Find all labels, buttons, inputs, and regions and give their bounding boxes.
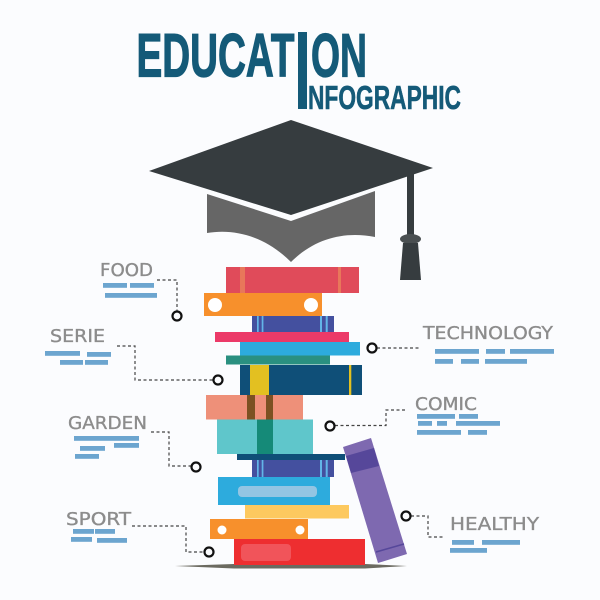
marker: technology (368, 344, 376, 352)
label: garden: GARDEN (68, 413, 147, 434)
title: ON (311, 22, 367, 90)
book: pink thin (215, 332, 349, 342)
callout: technology (368, 323, 554, 364)
book: blue with label (218, 477, 330, 505)
label: comic: COMIC (415, 394, 477, 415)
marker: garden (192, 462, 200, 472)
text lines: healthy (450, 540, 520, 553)
book: navy with yellow band (240, 365, 362, 395)
text lines: sport (71, 529, 127, 543)
title (136, 22, 461, 116)
marker: comic (326, 422, 334, 430)
book: indigo upper (252, 316, 334, 332)
text lines: garden (74, 436, 139, 459)
callout: sport (66, 509, 214, 556)
book: indigo lower (252, 460, 334, 477)
label: serie: SERIE (50, 326, 105, 347)
title: EDUCAT (136, 22, 294, 90)
book: teal thin (226, 356, 330, 364)
icon: graduation cap (149, 120, 433, 280)
connector: sport (132, 526, 204, 552)
text lines: technology (435, 349, 554, 364)
label: sport: SPORT (66, 509, 132, 530)
book: navy thin (237, 454, 345, 460)
marker: serie (214, 376, 222, 384)
connector: serie (117, 346, 213, 380)
label: food: FOOD (100, 260, 153, 281)
title: NFOGRAPHIC (308, 79, 461, 116)
connector: food (157, 280, 177, 311)
connector: healthy (411, 516, 443, 537)
label: technology: TECHNOLOGY (422, 323, 554, 344)
book: orange with dots (204, 293, 322, 316)
marker: food (172, 312, 182, 320)
book: red bottom (234, 539, 365, 565)
book: light teal (217, 420, 313, 454)
book: orange lower (210, 519, 308, 539)
book: red top (226, 267, 359, 293)
ground shadow (175, 564, 407, 568)
book: cyan thin (240, 342, 360, 356)
text lines: serie (45, 351, 111, 365)
callout: comic (326, 394, 500, 435)
connector: comic (335, 410, 405, 426)
book stack (175, 267, 407, 568)
text lines: comic (417, 414, 500, 435)
book: yellow (245, 505, 349, 518)
marker: sport (204, 548, 214, 556)
book: leaning purple (343, 438, 407, 563)
callout: garden (68, 413, 200, 472)
callout: serie (45, 326, 222, 384)
label: healthy: HEALTHY (450, 514, 540, 535)
callout: food (100, 260, 182, 320)
marker: healthy (402, 512, 410, 520)
connector: garden (151, 432, 191, 466)
callout: healthy (402, 512, 540, 553)
text lines: food (103, 283, 157, 298)
book: salmon (206, 395, 303, 420)
connector: technology (377, 347, 421, 349)
